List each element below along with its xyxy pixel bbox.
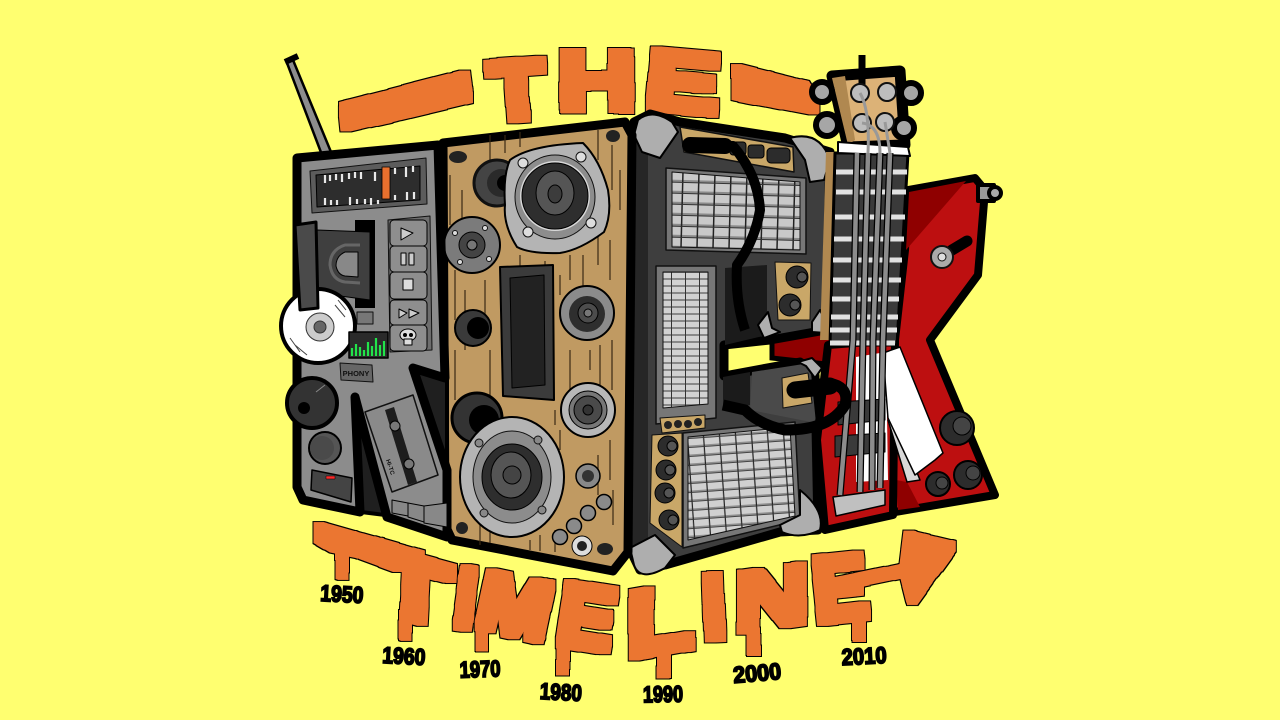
cassette tape: [365, 395, 438, 492]
left plate knobs: [655, 436, 679, 530]
guitar lower body: [817, 340, 895, 530]
letter H: H: [557, 37, 637, 126]
heading: TIMELINE with arrow: [318, 527, 951, 676]
cable plug: [690, 145, 725, 146]
guitar neck and headstock: [723, 55, 943, 530]
power switch: [311, 470, 352, 502]
letter E: E: [642, 33, 724, 131]
1990: 1990: [643, 681, 683, 707]
bottom keys: [392, 500, 447, 527]
tail screw: [978, 185, 1001, 201]
letter I: I: [451, 551, 481, 646]
tuner frame: [310, 158, 427, 213]
flourish bar of T: [318, 527, 420, 567]
CD disc: [281, 289, 355, 363]
fast forward button: [390, 300, 427, 325]
guitar K body (red): [885, 178, 1001, 512]
horn: [500, 265, 554, 400]
right plate knobs: [779, 266, 808, 316]
middle grille frame: [656, 266, 716, 424]
letter E: E: [809, 535, 871, 641]
white pickguard: [883, 347, 943, 475]
toggle switch: [931, 241, 967, 268]
bridge: [833, 490, 885, 516]
drip 1990: [662, 650, 666, 673]
lower grille mesh: [688, 427, 795, 540]
tuning pegs: [812, 82, 921, 138]
arrow: [838, 536, 951, 600]
frets: [830, 172, 907, 343]
skull button: [390, 325, 427, 351]
mid driver right: [560, 286, 614, 340]
large bottom speaker: [460, 417, 564, 537]
strings highlight: [840, 153, 890, 495]
big dial: [287, 378, 337, 428]
cassette tape: HI-TC: [384, 459, 395, 476]
knob 3: [926, 472, 950, 496]
small dial: [309, 432, 341, 464]
year labels: [320, 580, 887, 707]
top grille mesh: [672, 172, 800, 250]
top grille frame: [666, 168, 806, 254]
letter M: M: [470, 554, 560, 657]
1960: 1960: [382, 642, 426, 670]
radio body: [297, 145, 447, 537]
letter I: I: [701, 557, 727, 656]
jack socket: [572, 536, 592, 556]
port middle: [455, 310, 491, 346]
tweeter left: [444, 217, 500, 273]
amp cabinet: [628, 114, 830, 570]
headstock post: [858, 55, 866, 90]
middle grille mesh: [663, 272, 708, 408]
U inner: [336, 252, 358, 277]
level meter bars: [352, 338, 384, 356]
letter E: E: [552, 564, 622, 669]
port bottom: [452, 393, 502, 443]
pause button: [390, 246, 427, 272]
button panel: [388, 216, 432, 352]
antenna tip: [285, 56, 298, 62]
1970: 1970: [459, 655, 501, 683]
left control plate: [650, 433, 682, 547]
wood speaker cabinet (letter O): [443, 122, 632, 571]
right knob plate: [775, 262, 811, 320]
letter L: L: [626, 564, 694, 676]
knob 2: [954, 461, 982, 489]
lower grille frame: [683, 422, 800, 548]
top cable: [697, 145, 760, 330]
letter T: T: [376, 531, 454, 647]
1980: 1980: [539, 678, 583, 706]
jack cable plug: [795, 386, 830, 390]
amp corner protectors: [630, 114, 830, 574]
left side strip: [632, 128, 648, 560]
tweeter right: [561, 383, 615, 437]
dark red lower facet: [896, 480, 920, 510]
tuning posts: [851, 83, 896, 132]
door front over disc: [295, 222, 318, 310]
pickup 2: [835, 433, 885, 457]
nut: [838, 142, 910, 156]
play button: [390, 220, 427, 246]
top panel knobs: [730, 142, 790, 163]
radio (letter R): [281, 145, 447, 537]
antenna rod: [287, 60, 331, 155]
left dash of heading: [344, 76, 468, 127]
PHONY label: [340, 363, 373, 382]
white plate under pickups: [856, 352, 888, 482]
drip 2000: [752, 632, 756, 651]
drip 1970: [481, 628, 483, 647]
tuner display: [316, 166, 420, 207]
level meter screen: [349, 332, 388, 358]
sliders row: [552, 494, 612, 544]
door holder: [317, 230, 370, 300]
headstock: [832, 71, 905, 147]
2010: 2010: [841, 642, 887, 670]
drip 1960: [404, 615, 407, 636]
letter T: T: [487, 44, 548, 137]
stop button: [390, 272, 427, 299]
2000: 2000: [732, 658, 782, 688]
antenna: [285, 56, 331, 155]
small label: [357, 312, 373, 324]
headstock strings: [860, 93, 890, 153]
neck wood edge: [820, 152, 836, 340]
drip 2010: [857, 615, 861, 637]
letter N: N: [735, 548, 809, 648]
pickguard shadow plate: [888, 418, 920, 482]
large top speaker: [505, 143, 609, 253]
PHONY label: PHONY: [343, 369, 369, 378]
jack block: [750, 363, 816, 423]
slot: [355, 220, 375, 308]
1950: 1950: [320, 580, 364, 608]
headstock shadow: [832, 76, 855, 145]
lower jack cable: [723, 383, 846, 430]
top control panel: [680, 127, 794, 172]
dark recess: [725, 265, 767, 345]
drip 1950: [340, 550, 343, 575]
tuner ticks: [325, 166, 414, 205]
dark notch behind legs: [345, 368, 447, 515]
jack plate: [782, 373, 812, 408]
cabinet body: [443, 122, 632, 571]
cabinet screws: [449, 130, 620, 555]
port top: [474, 160, 520, 206]
heading: THE: [344, 33, 814, 137]
drip 1980: [561, 645, 564, 670]
amplifier (letter C): [628, 114, 830, 574]
U bracket: [330, 245, 360, 283]
small strip plate: [660, 415, 705, 433]
dark red upper facet: [906, 181, 966, 250]
right dash of heading: [736, 69, 814, 110]
small knob: [576, 464, 600, 488]
wood grain: [450, 130, 620, 552]
knob 1: [940, 411, 974, 445]
tuner needle: [382, 167, 390, 199]
neck fretboard: [830, 153, 908, 345]
K arm and leg: [885, 178, 995, 512]
lower recess: [723, 372, 750, 408]
pickup 1: [838, 399, 885, 425]
dark red body behind amp: [772, 330, 835, 365]
strings: [840, 153, 890, 495]
